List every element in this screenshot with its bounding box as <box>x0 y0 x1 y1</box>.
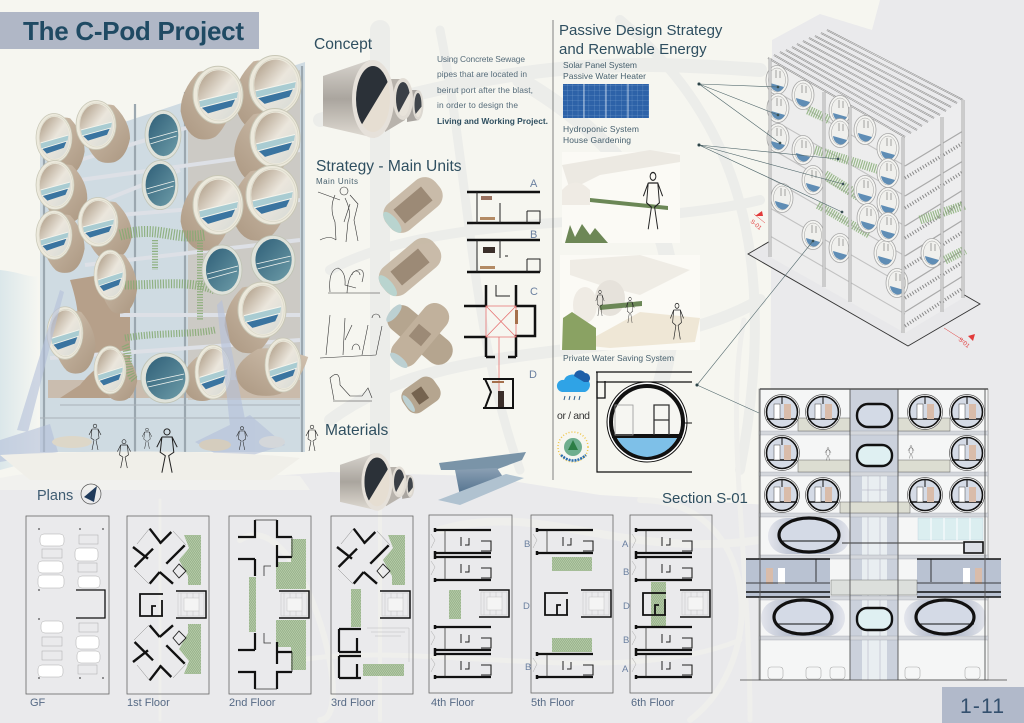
label: 2nd floor: 2nd Floor <box>229 697 276 709</box>
materials: concrete pipes <box>340 453 414 511</box>
axonometric building <box>748 30 980 350</box>
concept description: beirut port after the blast, <box>437 85 533 95</box>
facade rendering <box>0 56 318 480</box>
title band <box>0 12 259 49</box>
label: GF: GF <box>30 697 46 709</box>
labels: 6th floor unit types: D <box>623 601 630 612</box>
icon: water logo <box>558 432 588 462</box>
leader lines <box>696 83 844 424</box>
row 3 <box>764 478 984 512</box>
solar label <box>563 60 646 81</box>
heading: Passive Design: Passive Design Strategy <box>559 22 723 39</box>
icon: rain cloud <box>557 370 590 400</box>
walls <box>760 389 985 680</box>
heading: Section: Section S-01 <box>662 490 748 507</box>
materials: steel I-beam <box>438 452 526 505</box>
labels: 5th floor unit types: B <box>525 662 531 673</box>
divider <box>552 20 554 480</box>
label: 3rd floor: 3rd Floor <box>331 697 375 709</box>
ground floor cars <box>768 667 980 679</box>
plan: 5th floor <box>531 515 613 693</box>
labels: 6th floor unit types: B <box>623 567 629 578</box>
plan: GF <box>26 516 109 694</box>
unit plans A B C D: B <box>530 229 537 241</box>
labels: 5th floor unit types: D <box>523 601 530 612</box>
vines <box>808 110 965 260</box>
pod bodies <box>38 60 308 401</box>
plan D <box>483 379 513 408</box>
heading: Concept: Concept <box>314 36 373 53</box>
row 1 <box>764 394 984 430</box>
labels: 6th floor unit types: A <box>622 539 629 550</box>
pods <box>36 56 301 403</box>
hydroponic label <box>563 124 639 145</box>
section markers <box>749 211 975 350</box>
concept description: pipes that are located in <box>437 69 527 79</box>
concept description: in order to design the <box>437 100 518 110</box>
unit plans A B C D: C <box>530 286 538 298</box>
columns <box>770 58 963 333</box>
icon: north arrow <box>81 484 101 504</box>
concept description: Living and Working Project. <box>437 116 548 126</box>
label: 6th floor: 6th Floor <box>631 697 675 709</box>
heading: Passive Design: and Renwable Energy <box>559 41 707 58</box>
plan: 2nd floor <box>229 516 311 694</box>
plan: 3rd floor <box>331 516 413 694</box>
plan A <box>467 192 540 223</box>
label: 1st floor: 1st Floor <box>127 697 170 709</box>
solar label: Passive Water Heater <box>563 71 646 81</box>
left face slabs <box>770 88 905 314</box>
street scene <box>0 424 318 480</box>
plan C <box>464 285 535 392</box>
water saving section <box>596 372 692 472</box>
cranes <box>0 290 285 462</box>
heading: Strategy: Strategy - Main Units <box>316 158 462 175</box>
facade glass and structure <box>40 62 305 452</box>
pods <box>766 66 943 298</box>
vines <box>120 231 215 380</box>
plan: 4th floor <box>429 515 512 693</box>
row 5 tubes <box>746 559 1001 597</box>
hydroponic label: House Gardening <box>563 135 631 145</box>
page number tag <box>942 687 1024 723</box>
subheading: Main Units: Main Units <box>316 177 358 186</box>
section markers: S-01 <box>957 337 971 350</box>
render: stepped garden <box>560 255 700 350</box>
labels: 6th floor unit types: B <box>623 635 629 646</box>
unit plans A B C D: A <box>530 178 538 190</box>
concept description <box>437 54 548 126</box>
hydroponic label: Hydroponic System <box>563 124 639 134</box>
unit plans A B C D: D <box>529 369 537 381</box>
concept pipes <box>323 60 424 138</box>
right face <box>905 100 963 333</box>
section drawing <box>740 389 1007 680</box>
unit models <box>367 171 473 417</box>
plan B <box>467 240 540 272</box>
title band: The C-Pod Project <box>23 16 244 46</box>
floor plate <box>748 212 980 346</box>
water saving label: Private Water Saving System <box>563 353 674 363</box>
row 4 <box>768 518 983 554</box>
labels: 5th floor unit types: B <box>524 539 530 550</box>
row 6 <box>761 600 986 636</box>
render: garden corridor <box>562 150 680 243</box>
heading: Passive Design <box>559 22 723 58</box>
concept description: Using Concrete Sewage <box>437 54 525 64</box>
section markers: S-01 <box>749 219 763 232</box>
section frame <box>759 389 988 680</box>
label: 5th floor: 5th Floor <box>531 697 575 709</box>
terrace floors <box>798 418 950 513</box>
solar label: Solar Panel System <box>563 60 637 70</box>
heading: Materials: Materials <box>325 422 388 439</box>
labels: 6th floor unit types <box>622 539 630 675</box>
solar panel <box>563 84 649 118</box>
people sketches <box>318 187 382 401</box>
heading: Plans: Plans <box>37 488 73 504</box>
row 2 <box>764 436 984 470</box>
page number tag: 1-11 <box>960 695 1004 718</box>
labels: 6th floor unit types: A <box>622 664 629 675</box>
plan: 1st floor <box>127 516 209 694</box>
slabs <box>759 431 988 640</box>
or / and: or / and <box>557 410 590 422</box>
labels: 5th floor unit types <box>523 539 531 673</box>
faces <box>770 58 905 333</box>
roof slats <box>768 30 963 137</box>
label: 4th floor: 4th Floor <box>431 697 475 709</box>
unit plans A B C D <box>464 178 540 408</box>
plan: 6th floor <box>630 515 712 693</box>
ground line <box>740 679 1007 681</box>
